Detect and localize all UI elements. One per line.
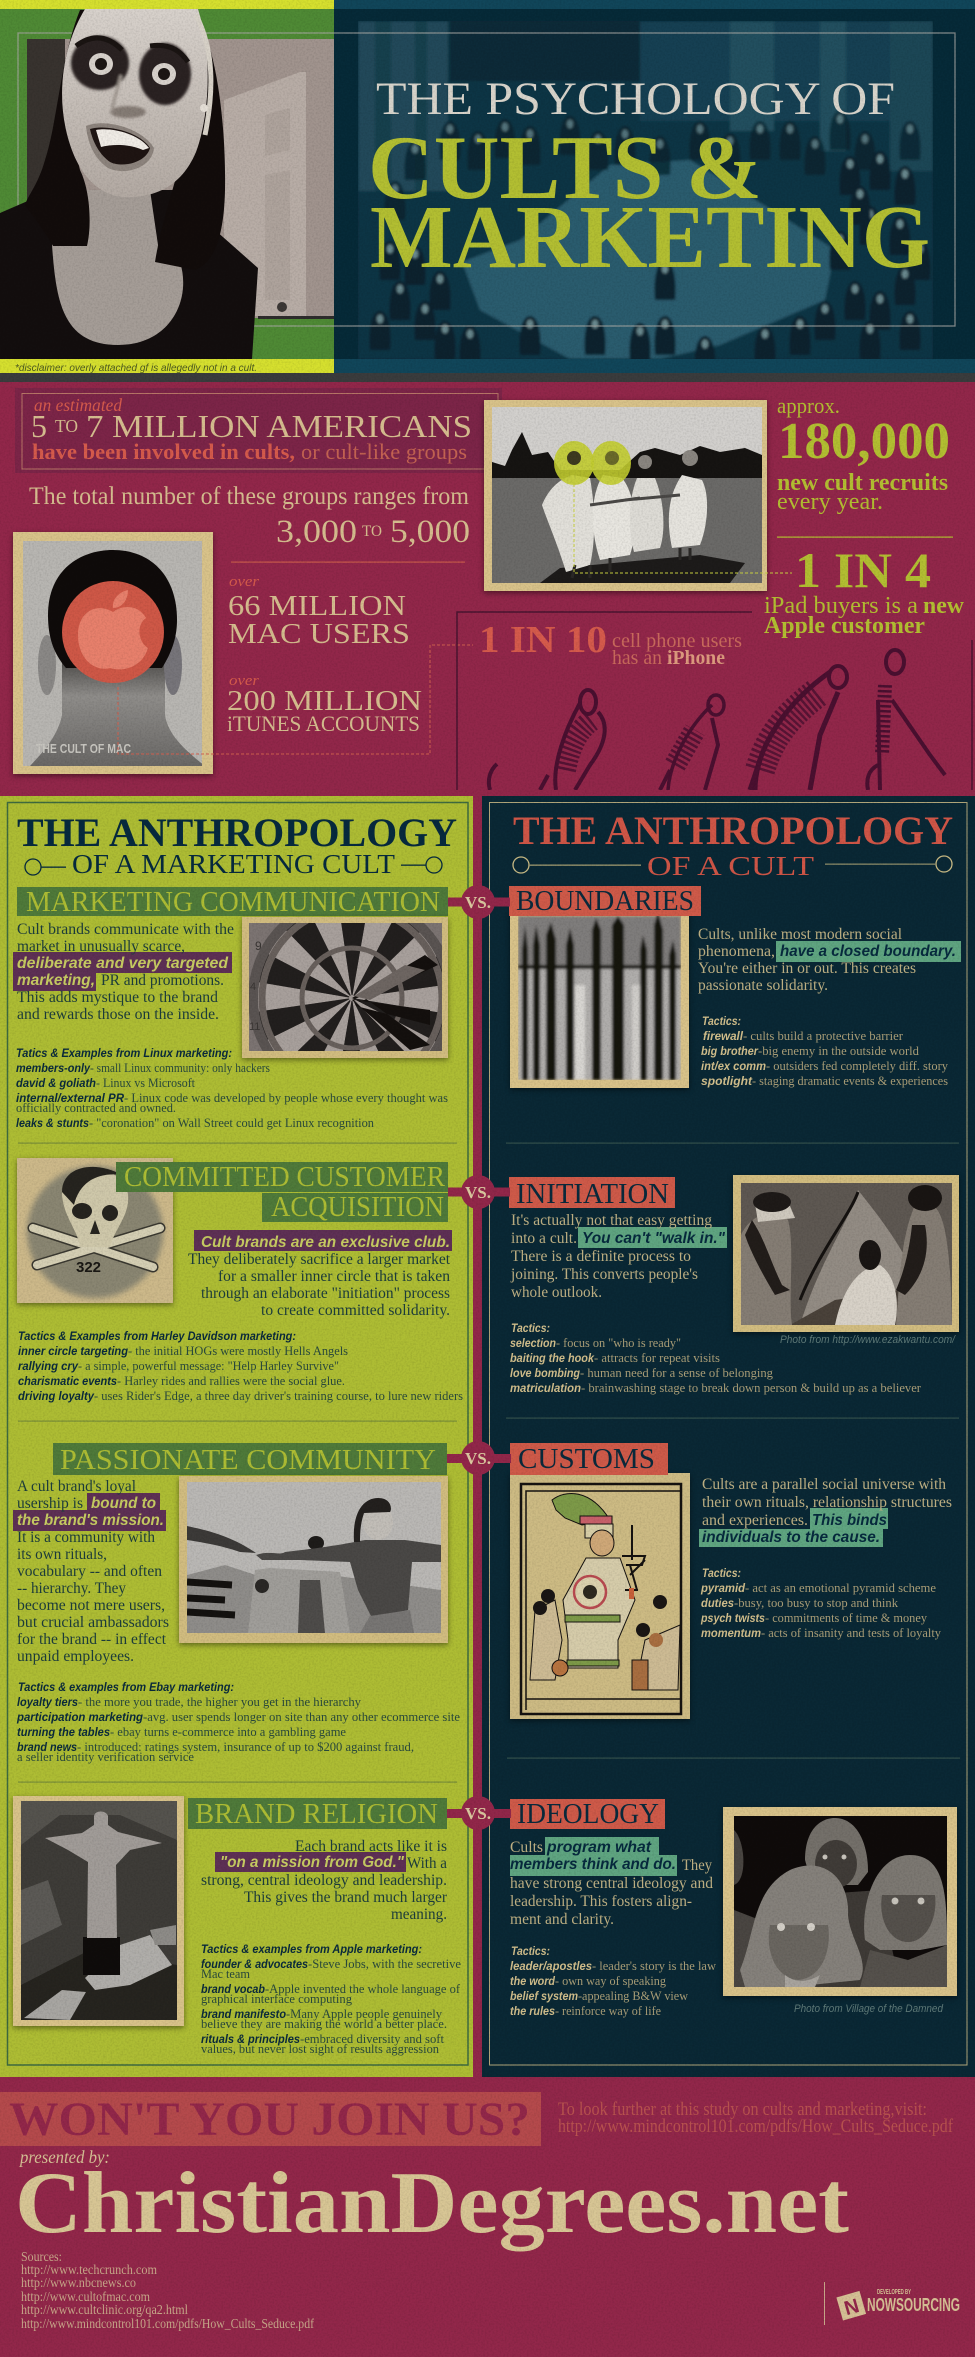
tactics: ebay: loyalty tiers	[17, 1697, 78, 1709]
crowd photo	[358, 21, 933, 375]
photo: dartboard: 4	[250, 981, 256, 993]
text block: and rewards those on the inside.	[17, 1006, 219, 1023]
stat: 180,000 recruits: 180,000	[778, 413, 950, 470]
text block: They deliberately sacrifice a larger market	[188, 1251, 451, 1268]
photo: arms outstretched	[179, 1476, 448, 1643]
text block: They	[682, 1857, 712, 1874]
presented by: ChristianDegrees.net	[15, 2155, 849, 2252]
tactics: ebay: - introduced: ratings system, insurance of up to $200 against fraud,	[77, 1740, 414, 1754]
stat: 1 in 4	[764, 542, 965, 639]
stat box: 5 to 7 million: or cult-like groups	[301, 439, 467, 464]
photo: skull and bones	[17, 1158, 173, 1303]
section: brand religion	[13, 1796, 461, 2056]
tactics: linux: members-only	[16, 1063, 91, 1075]
section: brand religion: BRAND RELIGION	[195, 1799, 438, 1830]
stat: number of groups: 3,000	[276, 514, 357, 550]
tactics: - own way of speaking	[555, 1974, 667, 1988]
text block: This adds mystique to the brand	[17, 989, 218, 1006]
tactics: harley davidson: inner circle targeting	[18, 1346, 128, 1358]
stat: 180,000 recruits: approx.	[777, 393, 840, 418]
text block: into a cult.	[511, 1230, 577, 1247]
photo: overly attached girlfriend	[0, 9, 334, 359]
further reading	[558, 2099, 954, 2137]
tactics: - brainwashing stage to break down person & build up as a believer	[581, 1381, 922, 1395]
text block: This gives the brand much larger	[244, 1889, 448, 1906]
tactics: - act as an emotional pyramid scheme	[745, 1581, 936, 1595]
section: customs: CUSTOMS	[518, 1444, 655, 1475]
tactics: -big enemy in the outside world	[758, 1044, 920, 1058]
text block: members think and do.	[510, 1856, 676, 1873]
disclaimer: *disclaimer: overly attached gf is allegedly not in a cult.	[15, 362, 257, 374]
text block: to create committed solidarity.	[261, 1302, 450, 1319]
photo: skull and bones: 322	[76, 1259, 101, 1276]
tactics: selection	[510, 1338, 556, 1350]
stats: mac users: over	[229, 574, 259, 590]
section: committed customer acquisition: COMMITTED CUSTOMER	[124, 1162, 445, 1193]
VS divider: religion vs ideology: VS.	[465, 1804, 491, 1823]
stats: mac users: iTUNES ACCOUNTS	[227, 711, 420, 736]
stat: number of groups	[29, 483, 470, 550]
stat: 1 in 10: 1 IN 10	[479, 619, 607, 661]
tactics: harley davidson: - the initial HOGs were mostly Hells Angels	[128, 1344, 348, 1358]
thin frame	[18, 33, 955, 326]
stat: 1 in 4: 1 IN 4	[795, 542, 931, 598]
tactics: ebay: a seller identity verification service	[17, 1750, 194, 1764]
text block: passionate solidarity.	[698, 977, 828, 994]
stat: 1 in 4: new	[923, 593, 965, 619]
photo: dartboard: 11	[249, 1021, 260, 1033]
tactics: harley davidson: charismatic events	[18, 1376, 117, 1388]
banner	[0, 0, 975, 382]
text block: market in unusually scarce,	[17, 938, 185, 955]
photo: cult of mac: THE CULT OF MAC	[36, 741, 131, 756]
VS divider: community vs customs: VS.	[465, 1449, 491, 1468]
text block: It's actually not that easy getting	[511, 1212, 712, 1229]
text block: whole outlook.	[511, 1284, 602, 1301]
section: passionate community	[13, 1443, 460, 1764]
tactics: linux: - Linux code was developed by people whose every thought was	[124, 1091, 448, 1105]
stat: 1 in 10: iPhone	[667, 647, 725, 669]
tactics: belief system	[510, 1991, 578, 2003]
panel: skeletons	[457, 612, 972, 790]
VS divider: community vs customs	[447, 1441, 511, 1475]
text block: vocabulary -- and often	[17, 1563, 162, 1580]
stat box: 5 to 7 million: have been involved in cults,	[32, 439, 295, 464]
text block: and experiences.	[702, 1512, 808, 1529]
text block: With a	[407, 1855, 447, 1872]
stat: 1 in 10: cell phone users	[612, 630, 742, 652]
tactics: ebay: brand news	[17, 1742, 77, 1754]
tactics: apple: founder & advocates	[201, 1959, 308, 1971]
tactics: - focus on "who is ready"	[556, 1336, 681, 1350]
section: initiation: INITIATION	[516, 1179, 669, 1210]
stat: number of groups: 5,000	[390, 514, 470, 550]
text block: joining. This converts people's	[510, 1266, 698, 1283]
stat: 180,000 recruits: every year.	[777, 489, 883, 515]
tactics: linux: - Linux vs Microsoft	[96, 1076, 195, 1090]
tactics	[700, 1568, 942, 1640]
tactics: - human need for a sense of belonging	[580, 1366, 774, 1380]
text block	[188, 1230, 452, 1319]
tactics: apple	[201, 1944, 461, 2056]
tactics: momentum	[701, 1628, 761, 1640]
stats: mac users	[227, 574, 422, 736]
sources: http://www.cultclinic.org/qa2.html	[21, 2302, 188, 2317]
sources	[21, 2249, 314, 2331]
tactics: Tactics:	[511, 1323, 550, 1335]
stats: mac users: 66 MILLION	[228, 590, 406, 622]
tactics: apple: -embraced diversity and soft	[300, 2032, 445, 2046]
tactics: apple: values, but never lost sight of results aggression	[201, 2042, 440, 2056]
tactics: linux: officially contracted and owned.	[16, 1101, 176, 1115]
stat: 1 in 10: has an	[612, 647, 662, 669]
text block	[13, 1478, 169, 1665]
title: MARKETING	[370, 188, 930, 287]
sources: Sources:	[21, 2249, 62, 2264]
tactics: apple: brand manifesto	[201, 2009, 286, 2021]
tactics: - reinforce way of life	[555, 2004, 661, 2018]
tactics: ebay: turning the tables	[17, 1727, 110, 1739]
text block: for the brand -- in effect	[17, 1631, 167, 1648]
text block: Each brand acts like it is	[295, 1838, 447, 1855]
text block: meaning.	[391, 1906, 447, 1923]
tactics: Tactics:	[702, 1016, 741, 1028]
text block: for a smaller inner circle that is taken	[218, 1268, 450, 1285]
VS divider: communication vs boundaries: VS.	[465, 893, 491, 912]
tactics: - staging dramatic events & experiences	[752, 1074, 948, 1088]
tactics: the word	[510, 1976, 556, 1988]
section: boundaries	[509, 886, 961, 1088]
text block: This binds	[812, 1512, 887, 1529]
title: THE PSYCHOLOGY OF	[376, 73, 895, 125]
tactics: ebay: -avg. user spends longer on site than any other ecommerce site	[143, 1710, 460, 1724]
tactics: - commitments of time & money	[765, 1611, 928, 1625]
sources: http://www.nbcnews.co	[21, 2275, 136, 2290]
stat: 180,000 recruits: new cult recruits	[777, 470, 948, 496]
stat: 1 in 4: Apple customer	[764, 613, 925, 639]
text block: program what	[546, 1839, 652, 1856]
stat: number of groups: The total number of these groups ranges from	[29, 483, 470, 510]
tactics: linux: - small Linux community: only hackers	[90, 1061, 270, 1075]
tactics: - leader's story is the law	[592, 1959, 716, 1973]
title: CULTS &	[368, 117, 762, 218]
illustration: aztec codex	[510, 1473, 690, 1719]
sources: http://www.mindcontrol101.com/pdfs/How_Cults_Seduce.pdf	[21, 2316, 314, 2331]
tactics: apple: Tactics & examples from Apple marketing:	[201, 1944, 422, 1956]
text block: have a closed boundary.	[780, 943, 956, 960]
text block: but crucial ambassadors	[17, 1614, 169, 1631]
text block: Cults, unlike most modern social	[698, 926, 902, 943]
caption: Photo from Village of the Damned	[794, 2003, 944, 2015]
tactics: - cults build a protective barrier	[743, 1029, 904, 1043]
photo: dartboard: 9	[255, 939, 262, 953]
text block: You're either in or out. This creates	[698, 960, 916, 977]
stats: mac users: over	[229, 673, 259, 689]
photo: initiation ritual	[733, 1175, 959, 1332]
stat: 1 in 10	[479, 619, 742, 669]
tactics: the rules	[510, 2006, 555, 2018]
text block	[201, 1838, 448, 1923]
text block	[699, 1476, 952, 1547]
title	[368, 73, 930, 287]
section: marketing communication: MARKETING COMMUNICATION	[26, 887, 440, 918]
tactics: linux: - "coronation" on Wall Street could get Linux recognition	[89, 1116, 375, 1130]
text block: deliberate and very targeted	[17, 955, 229, 972]
tactics: apple: -Many Apple people genuinely	[286, 2007, 443, 2021]
stat: 180,000 recruits	[777, 393, 950, 515]
tactics: ebay	[16, 1682, 460, 1764]
photo: village of the damned	[723, 1807, 957, 1996]
tactics: psych twists	[700, 1613, 765, 1625]
text block: ment and clarity.	[510, 1911, 614, 1928]
tactics: int/ex comm	[701, 1061, 766, 1073]
tactics: linux: david & goliath	[16, 1078, 96, 1090]
heading: THE ANTHROPOLOGY	[17, 810, 457, 855]
stat box: 5 to 7 million: 7 MILLION AMERICANS	[86, 408, 472, 444]
tactics: linux: leaks & stunts	[16, 1118, 89, 1130]
heading: OF A MARKETING CULT	[72, 849, 396, 879]
tactics: pyramid	[700, 1583, 746, 1595]
text block: phenomena,	[698, 943, 775, 960]
text block: leadership. This fosters align-	[510, 1893, 692, 1910]
text block: You can't "walk in."	[582, 1230, 726, 1247]
text block: through an elaborate "initiation" process	[201, 1285, 450, 1302]
photo: dartboard	[238, 916, 452, 1064]
text block: bound to	[91, 1495, 156, 1512]
developer logo: nowsourcing	[824, 2282, 960, 2325]
sources: http://www.techcrunch.com	[21, 2262, 157, 2277]
tactics: ebay: - ebay turns e-commerce into a gambling game	[110, 1725, 346, 1739]
text block: individuals to the cause.	[702, 1529, 880, 1546]
section: ideology: IDEOLOGY	[517, 1799, 659, 1830]
tactics: apple: believe they are making the world a better place.	[201, 2017, 447, 2031]
tactics: baiting the hook	[510, 1353, 595, 1365]
text block: Cult brands communicate with the	[17, 921, 234, 938]
VS divider: communication vs boundaries	[448, 885, 510, 919]
tactics: duties	[701, 1598, 734, 1610]
VS divider: religion vs ideology	[447, 1796, 511, 1830]
tactics	[510, 1323, 922, 1395]
tactics: linux: internal/external PR	[16, 1093, 125, 1105]
text block	[698, 926, 961, 994]
tactics: -appealing B&W view	[578, 1989, 688, 2003]
tactics: big brother	[701, 1046, 758, 1058]
text block: have strong central ideology and	[510, 1875, 713, 1892]
tactics: - attracts for repeat visits	[594, 1351, 720, 1365]
tactics: apple: brand vocab	[201, 1984, 265, 1996]
section: customs	[510, 1443, 952, 1719]
photo: white robes	[484, 400, 767, 591]
tactics: Tactics:	[702, 1568, 741, 1580]
presented by: presented by:	[18, 2147, 110, 2167]
text block: There is a definite process to	[511, 1248, 691, 1265]
stat box: 5 to 7 million: an estimated	[34, 395, 123, 415]
text block: PR and promotions.	[101, 972, 224, 989]
panel: anthropology of a marketing cult	[0, 796, 473, 2077]
text block: their own rituals, relationship structures	[702, 1494, 952, 1511]
text block: It is a community with	[17, 1529, 155, 1546]
photo: iron fence	[510, 910, 689, 1088]
text block	[510, 1212, 727, 1301]
tactics: -busy, too busy to stop and think	[734, 1596, 899, 1610]
tactics: ebay: Tactics & examples from Ebay marketing:	[18, 1682, 234, 1694]
text block: its own rituals,	[17, 1546, 107, 1563]
tactics: matriculation	[510, 1383, 581, 1395]
tactics: linux: Tatics & Examples from Linux marketing:	[16, 1048, 232, 1060]
tactics: apple: Mac team	[201, 1967, 250, 1981]
stat box: 5 to 7 million: 5	[31, 408, 47, 444]
tactics: harley davidson: rallying cry	[18, 1361, 79, 1373]
text block: Cult brands are an exclusive club.	[201, 1234, 450, 1251]
heading: OF A CULT	[647, 851, 815, 881]
tactics: ebay: - the more you trade, the higher you get in the hierarchy	[78, 1695, 362, 1709]
text block	[13, 921, 234, 1023]
text block: Cults are a parallel social universe with	[702, 1476, 946, 1493]
text block: -- hierarchy. They	[17, 1580, 126, 1597]
tactics: - acts of insanity and tests of loyalty	[761, 1626, 942, 1640]
panel: anthropology of a cult	[482, 796, 975, 2077]
text block: strong, central ideology and leadership.	[201, 1872, 447, 1889]
photo: christ the redeemer	[13, 1796, 184, 2026]
dashed connector: mac to iphone	[118, 645, 473, 754]
stat box: 5 to 7 million: TO	[55, 416, 78, 436]
section: ideology	[510, 1799, 957, 2018]
tactics: ebay: participation marketing	[16, 1712, 143, 1724]
tactics: love bombing	[510, 1368, 580, 1380]
tactics: apple: graphical interface computing	[201, 1992, 353, 2006]
VS divider: acquisition vs initiation: VS.	[465, 1183, 491, 1202]
stat: 1 in 4: iPad buyers is a	[764, 593, 918, 619]
text block: Cults	[510, 1839, 543, 1856]
heading	[17, 810, 457, 879]
tactics: - outsiders fed completely diff. story	[766, 1059, 949, 1073]
tactics: apple: rituals & principles	[201, 2034, 300, 2046]
tactics: linux	[16, 1048, 448, 1130]
tactics: harley davidson: - uses Rider's Edge, a three day driver's training course, to lure new riders	[94, 1389, 463, 1403]
text block: A cult brand's loyal	[17, 1478, 136, 1495]
section: committed customer acquisition: ACQUISITION	[271, 1192, 444, 1223]
tactics: harley davidson: - Harley rides and rallies were the social glue.	[117, 1374, 345, 1388]
text block	[510, 1837, 713, 1928]
stat box: 5 to 7 million	[15, 388, 502, 473]
tactics: apple: -Apple invented the whole language of	[265, 1982, 461, 1996]
sources: http://www.cultofmac.com	[21, 2289, 150, 2304]
developer logo: nowsourcing: N	[842, 2295, 862, 2320]
stats: mac users: MAC USERS	[228, 618, 410, 650]
tactics: harley davidson: - a simple, powerful message: "Help Harley Survive"	[78, 1359, 339, 1373]
text block: "on a mission from God."	[220, 1854, 405, 1871]
section: marketing communication	[13, 887, 456, 1130]
text block: the brand's mission.	[17, 1512, 164, 1529]
section: committed customer acquisition	[17, 1158, 463, 1403]
tactics: harley davidson: driving loyalty	[18, 1391, 95, 1403]
tactics: firewall	[703, 1031, 744, 1043]
tactics	[510, 1946, 716, 2018]
tactics: Tactics:	[511, 1946, 550, 1958]
caption: Photo from http://www.ezakwantu.com/	[780, 1334, 956, 1346]
heading	[513, 808, 953, 881]
text block: marketing,	[17, 972, 95, 989]
dashed connector: robes to 1 in 4	[574, 484, 792, 573]
heading: THE ANTHROPOLOGY	[513, 808, 953, 853]
tactics: leader/apostles	[510, 1961, 592, 1973]
text block: usership is	[17, 1495, 83, 1512]
tactics	[701, 1016, 949, 1088]
photo: cult of mac	[13, 532, 213, 774]
stat: number of groups: TO	[362, 523, 382, 540]
section: passionate community: PASSIONATE COMMUNITY	[60, 1445, 436, 1476]
stats: mac users: 200 MILLION	[227, 685, 422, 717]
VS divider: acquisition vs initiation	[448, 1175, 510, 1209]
tactics: spotlight	[701, 1076, 753, 1088]
text block: become not mere users,	[17, 1597, 165, 1614]
tactics: harley davidson	[18, 1331, 463, 1403]
text block: unpaid employees.	[17, 1648, 134, 1665]
tactics: harley davidson: Tactics & Examples from Harley Davidson marketing:	[18, 1331, 296, 1343]
section: initiation	[509, 1175, 959, 1395]
tactics: apple: -Steve Jobs, with the secretive	[308, 1957, 461, 1971]
developer logo: nowsourcing: DEVELOPED BY	[877, 2289, 911, 2296]
footer banner: won't you join us: WON'T YOU JOIN US?	[9, 2093, 530, 2146]
section: boundaries: BOUNDARIES	[516, 886, 694, 917]
